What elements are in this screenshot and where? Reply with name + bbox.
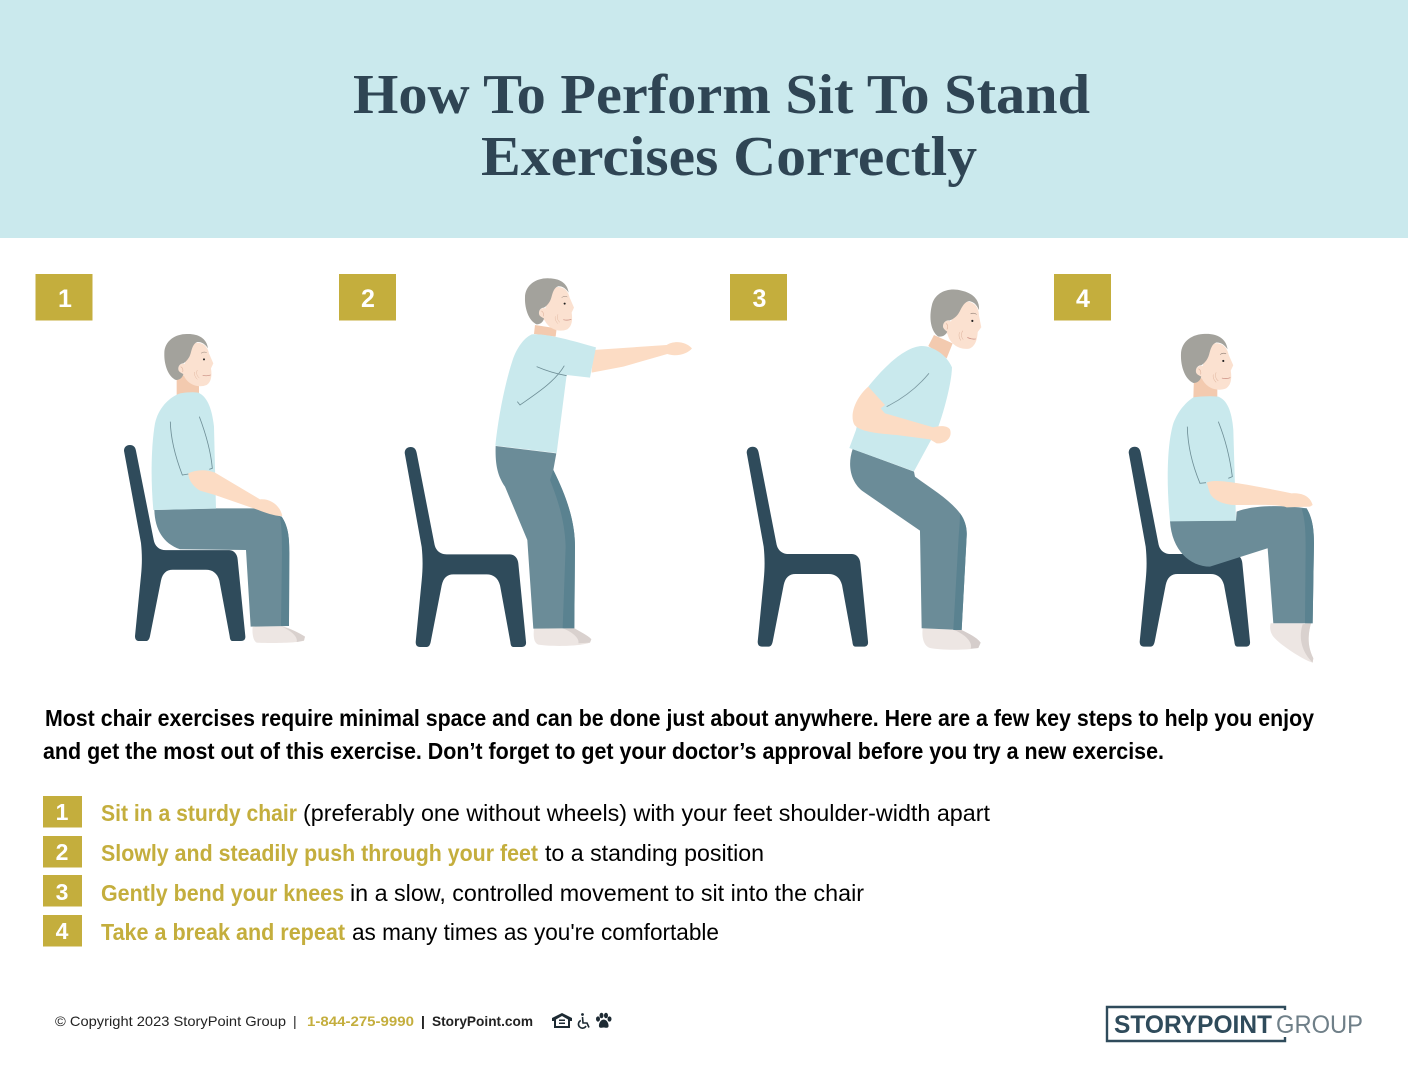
step 4: Take a break and repeat [101,919,345,945]
step 4: as many times as you're comfortable [352,919,719,945]
footer copyright line: 1-844-275-9990 [307,1013,414,1029]
person 3 [849,285,988,650]
step 3: 3 [56,879,68,905]
chair 2 [405,447,526,647]
step 3: in a slow, controlled movement to sit into the chair [350,880,864,906]
step badge 1: 1 [58,285,72,313]
intro paragraph: and get the most out of this exercise. Don’t forget to get your doctor’s approval before you try a new exercise. [43,738,1164,764]
step badge 4 [1054,274,1111,320]
step 2: to a standing position [545,840,764,866]
logo: StoryPoint Group: STORYPOINT [1114,1011,1272,1039]
footer copyright line: © Copyright 2023 StoryPoint Group [55,1013,286,1029]
footer copyright line: StoryPoint.com [432,1013,533,1029]
chair 4 [1129,447,1250,647]
step list [43,796,991,946]
icon: pet friendly paw [596,1013,612,1028]
footer copyright line [55,1013,533,1029]
step 3: Gently bend your knees [101,880,344,906]
logo: StoryPoint Group: GROUP [1276,1011,1363,1039]
step 1 [43,796,991,828]
figure 2: standing with arms out [405,278,692,647]
figure 4: lowered back onto chair [1129,334,1314,663]
step badge 4: 4 [1076,285,1090,313]
step 3 [43,875,864,906]
figure 3: leaning forward over knees [747,285,988,650]
figure 1: seated on chair [124,334,305,643]
title: How To Perform Sit To Stand [353,64,1090,126]
step 4 [43,915,719,946]
person 2 [495,278,692,646]
step badge 3: 3 [753,285,766,313]
step 1: 1 [56,799,69,825]
intro paragraph: Most chair exercises require minimal space and can be done just about anywhere. Here are a few key steps to help you enjoy [45,705,1314,731]
intro paragraph [43,705,1314,764]
footer copyright line: | [421,1013,425,1029]
step 2: Slowly and steadily push through your feet [101,840,538,866]
step badge 2: 2 [361,285,375,313]
header banner [0,0,1408,238]
step badge 2 [339,274,396,320]
icon: equal housing [552,1013,572,1028]
person 1 [152,334,305,643]
title: Exercises Correctly [481,126,977,188]
step 1: (preferably one without wheels) with your feet shoulder-width apart [303,800,991,826]
chair 3 [747,447,868,647]
step 2 [43,836,764,868]
step badge 3 [730,274,787,320]
step 1: Sit in a sturdy chair [101,800,297,826]
icon: wheelchair access [578,1013,589,1028]
logo: StoryPoint Group [1107,1007,1363,1041]
step badge 1 [36,274,92,320]
chair 1 [124,445,245,641]
step 4: 4 [56,918,69,944]
step 2: 2 [56,839,68,865]
person 4 [1168,334,1314,663]
title [353,64,1090,188]
footer copyright line: | [293,1013,297,1029]
